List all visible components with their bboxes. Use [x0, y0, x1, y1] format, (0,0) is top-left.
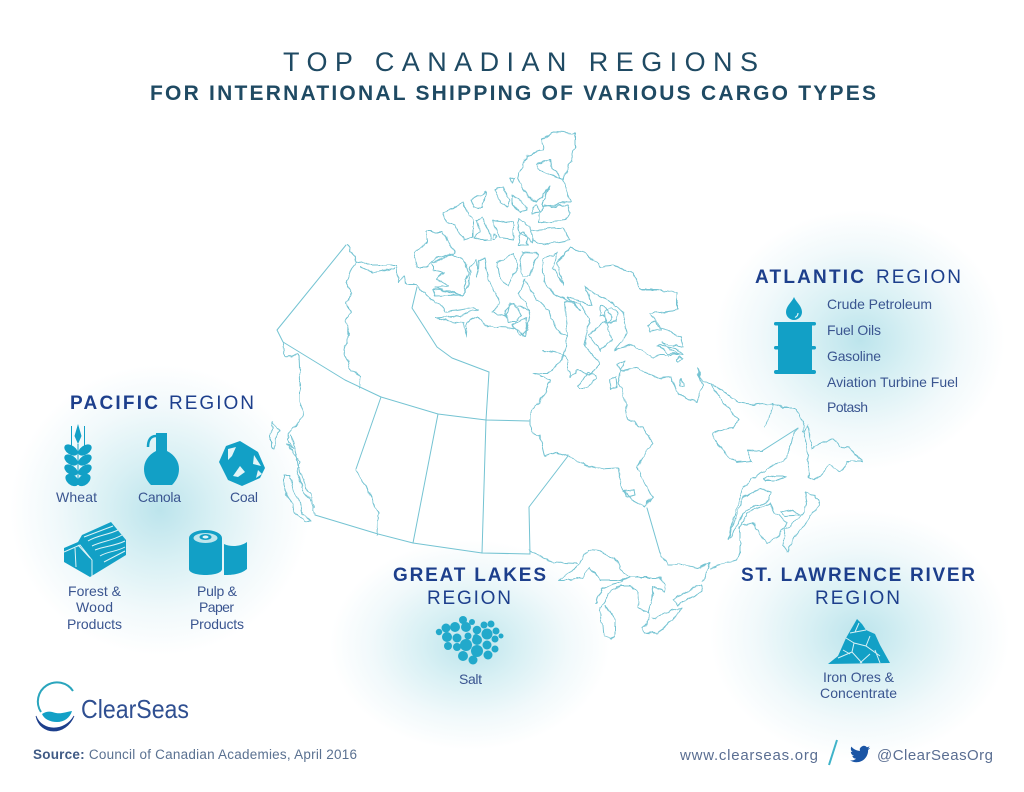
label: salt: Salt — [459, 671, 482, 687]
logo: Clear Seas: ClearSeas — [81, 694, 189, 724]
list: Atlantic cargo types: Gasoline — [827, 348, 881, 364]
heading: Atlantic region: ATLANTIC — [755, 267, 864, 288]
list: Atlantic cargo types: Aviation Turbine Fuel — [827, 374, 958, 390]
heading: Atlantic region: REGION — [876, 267, 961, 288]
icon: coal — [219, 441, 265, 486]
icon: iron ore pile — [828, 619, 890, 664]
label: iron ores and concentrate: Concentrate — [820, 685, 897, 701]
slash divider — [829, 740, 837, 765]
label: coal: Coal — [230, 489, 258, 505]
glow: Atlantic region — [715, 210, 1005, 470]
icon: forest and wood products — [64, 522, 126, 577]
icon: twitter bird — [850, 746, 870, 762]
label: iron ores and concentrate — [820, 669, 897, 701]
Newfoundland — [803, 425, 862, 480]
New Brunswick — [743, 503, 787, 543]
icon: salt crystals — [436, 616, 504, 664]
icon: oil drop and barrel — [774, 297, 816, 374]
heading: St. Lawrence region: REGION — [815, 588, 900, 609]
Hudson Bay coast — [518, 280, 568, 355]
label: forest and wood products: Products — [67, 616, 122, 632]
label: pulp and paper: Paper — [199, 599, 234, 615]
heading: Pacific region — [70, 393, 254, 414]
label: iron ores and concentrate: Iron Ores & — [823, 669, 895, 685]
panel: Atlantic region — [755, 267, 961, 415]
central Arctic islands — [497, 253, 518, 287]
Nova Scotia and Cape Breton — [783, 493, 820, 552]
icon: canola bottle — [144, 433, 179, 485]
website link: www.clearseas.org — [679, 747, 818, 764]
northern mainland coast — [357, 258, 530, 337]
glow: Pacific region — [10, 365, 310, 655]
label: forest and wood products: Wood — [76, 599, 113, 615]
Victoria and Banks Islands — [433, 253, 468, 295]
list: Atlantic cargo types: Fuel Oils — [827, 322, 881, 338]
Baffin Island — [543, 248, 683, 357]
glow: Great Lakes region — [330, 540, 610, 750]
heading: Great Lakes region — [393, 565, 546, 609]
list: Atlantic cargo types: Crude Petroleum — [827, 296, 932, 312]
Ellesmere Island — [518, 132, 575, 207]
panel: Pacific region — [56, 393, 265, 632]
Prince Edward Island — [780, 510, 800, 516]
list: Atlantic cargo types: Potash — [827, 399, 868, 415]
label: pulp and paper: Pulp & — [197, 583, 238, 599]
heading: St. Lawrence region — [741, 565, 975, 609]
logo: Clear Seas — [36, 682, 189, 731]
source note: Source: Council of Canadian Academies, April 2016 — [33, 747, 357, 762]
straight provincial and territorial borders — [277, 245, 529, 421]
label: pulp and paper — [190, 583, 244, 632]
glow: St. Lawrence region — [710, 510, 1010, 760]
Anticosti Island — [762, 476, 786, 481]
Gaspe and estuary — [728, 489, 770, 540]
Labrador border — [710, 383, 762, 463]
Vancouver Island — [284, 475, 310, 522]
heading: Great Lakes region: REGION — [427, 588, 511, 609]
rough coastlines and rivers — [271, 132, 862, 639]
heading: Great Lakes region: GREAT LAKES — [393, 565, 546, 586]
icon: wheat — [62, 424, 94, 489]
title — [150, 47, 876, 105]
heading: St. Lawrence region: ST. LAWRENCE RIVER — [741, 565, 975, 586]
twitter handle: @ClearSeasOrg — [877, 747, 993, 764]
list: Atlantic cargo types — [827, 296, 958, 415]
title: TOP CANADIAN REGIONS — [283, 47, 758, 77]
panel: St. Lawrence River region — [741, 565, 975, 701]
heading: Pacific region: REGION — [169, 393, 254, 414]
icon: pulp and paper — [189, 530, 247, 575]
panel: Great Lakes region — [393, 565, 546, 687]
map of Canada — [271, 132, 862, 639]
label: pulp and paper: Products — [190, 616, 244, 632]
heading: Pacific region: PACIFIC — [70, 393, 158, 414]
label: forest and wood products: Forest & — [68, 583, 122, 599]
label: wheat: Wheat — [56, 489, 97, 505]
Devon Island — [538, 205, 570, 223]
title: FOR INTERNATIONAL SHIPPING OF VARIOUS CARGO TYPES — [150, 82, 876, 105]
Haida Gwaii — [271, 423, 279, 449]
label: canola: Canola — [138, 489, 181, 505]
heading: Atlantic region — [755, 267, 961, 288]
Great Lakes and Ontario south — [530, 550, 577, 563]
label: forest and wood products — [67, 583, 122, 632]
